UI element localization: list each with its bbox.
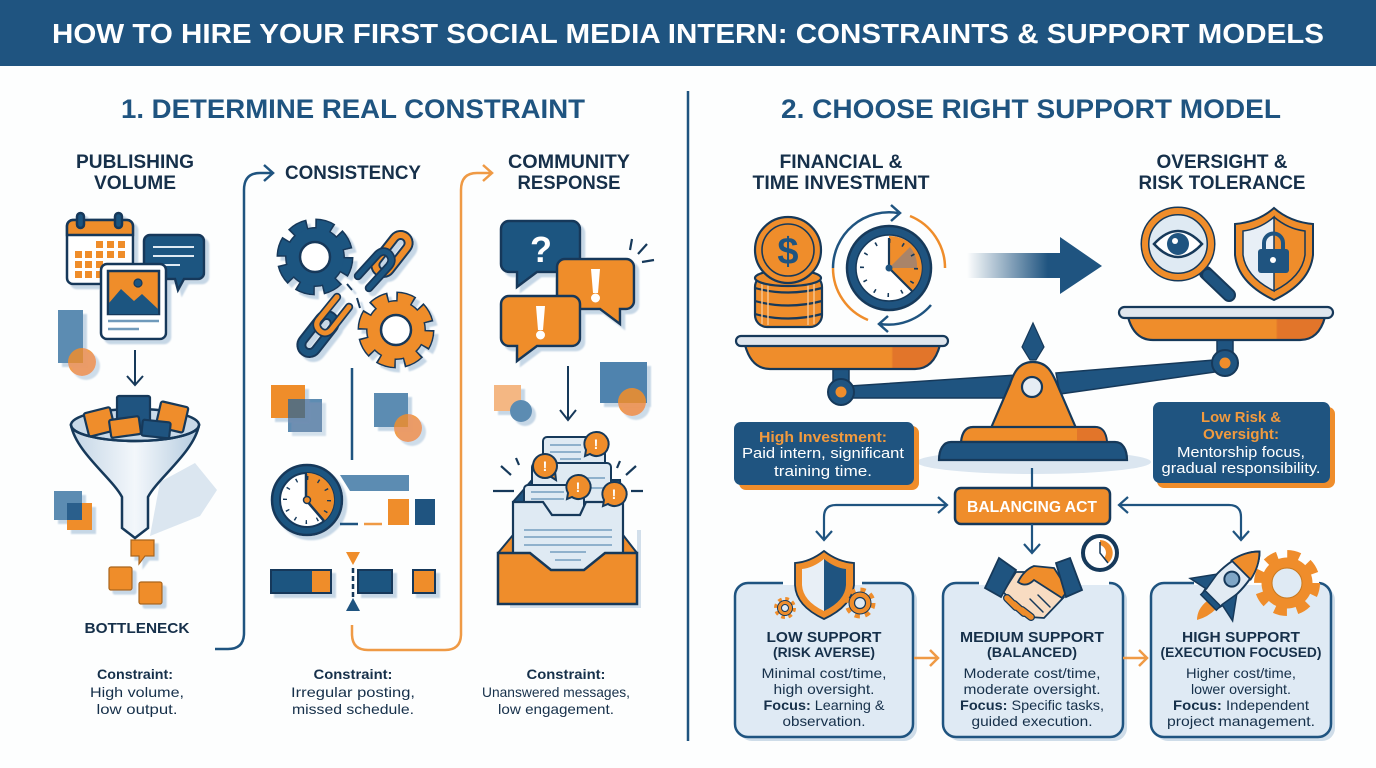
text: low support details bbox=[762, 629, 886, 729]
decorative shapes: community column bbox=[494, 362, 647, 422]
heading: oversight and risk tolerance bbox=[1138, 152, 1306, 194]
icon: magnifier with eye bbox=[1145, 211, 1229, 295]
arrow: low to medium support bbox=[914, 650, 938, 666]
callout: high investment: training time. bbox=[774, 464, 872, 480]
icon: handshake and small clock bbox=[979, 536, 1117, 618]
decorative shapes: blue rectangle and orange circle bbox=[58, 310, 96, 376]
text: medium support details: (BALANCED) bbox=[987, 645, 1077, 660]
text: low support details: observation. bbox=[782, 713, 866, 729]
text: low support details: (RISK AVERSE) bbox=[773, 645, 875, 660]
heading: publishing volume: VOLUME bbox=[94, 173, 176, 194]
divider line in consistency column bbox=[351, 368, 353, 460]
icon: gears and broken chain bbox=[284, 226, 427, 361]
text: high support details: lower oversight. bbox=[1191, 681, 1291, 697]
callout: low risk and oversight: Low Risk & bbox=[1201, 410, 1282, 426]
heading: financial and time investment bbox=[752, 152, 930, 194]
text: high support details: HIGH SUPPORT bbox=[1182, 629, 1300, 646]
callout: low risk and oversight: gradual responsibility. bbox=[1162, 461, 1320, 477]
decorative shapes: squares and circle bbox=[271, 385, 422, 442]
text: low support details: Focus: Learning & bbox=[764, 697, 885, 713]
text: constraint 2: Constraint: bbox=[314, 666, 392, 682]
icon: clock with schedule bars bbox=[272, 465, 435, 535]
text: medium support details bbox=[960, 629, 1104, 729]
arrows: balancing act to support cards bbox=[816, 497, 1249, 553]
icon: interrupted schedule blocks bbox=[271, 552, 435, 611]
icon: shield with lock bbox=[1235, 208, 1313, 300]
icon: speech bubbles with question and exclamation: ? bbox=[530, 229, 552, 270]
text: constraint 1 bbox=[90, 666, 184, 717]
decorative shapes: overlapping squares bbox=[54, 491, 92, 530]
heading: community response bbox=[508, 152, 630, 194]
text: high support details: (EXECUTION FOCUSED) bbox=[1160, 645, 1322, 660]
callout: high investment: Paid intern, significant bbox=[742, 446, 904, 462]
text: constraint 3 bbox=[482, 666, 630, 717]
text: high support details bbox=[1160, 629, 1322, 729]
text: low support details: high oversight. bbox=[774, 681, 874, 697]
arrow: medium to high support bbox=[1123, 650, 1147, 666]
heading: community response: COMMUNITY bbox=[508, 152, 630, 173]
text: constraint 3: Constraint: bbox=[526, 666, 606, 682]
text: high support details: project management. bbox=[1167, 713, 1315, 729]
label: balancing act: BALANCING ACT bbox=[967, 499, 1097, 516]
label: bottleneck: BOTTLENECK bbox=[84, 620, 190, 637]
callout: high investment: High Investment: bbox=[759, 430, 887, 446]
text: medium support details: MEDIUM SUPPORT bbox=[960, 629, 1104, 646]
text: constraint 1: Constraint: bbox=[97, 666, 173, 682]
text: low support details: Minimal cost/time, bbox=[762, 665, 886, 681]
text: high support details: Focus: Independent bbox=[1173, 697, 1309, 713]
arrow: investment to oversight bbox=[967, 237, 1102, 294]
callout: low risk and oversight: Oversight: bbox=[1203, 427, 1279, 443]
icon: overflowing inbox with alerts: ! bbox=[612, 486, 616, 502]
connector: scale to balancing act bbox=[1031, 468, 1033, 488]
callout: low risk and oversight bbox=[1153, 402, 1335, 488]
text: medium support details: guided execution. bbox=[972, 713, 1092, 729]
heading: financial and time investment: TIME INVESTMENT bbox=[752, 173, 930, 194]
text: high support details: Higher cost/time, bbox=[1186, 665, 1296, 681]
text: low support details: LOW SUPPORT bbox=[766, 629, 882, 646]
text: medium support details: Moderate cost/time, bbox=[964, 665, 1100, 681]
heading: consistency: CONSISTENCY bbox=[285, 163, 421, 184]
heading: community response: RESPONSE bbox=[518, 173, 620, 194]
text: medium support details: Focus: Specific tasks, bbox=[960, 697, 1104, 713]
heading: financial and time investment: FINANCIAL & bbox=[780, 152, 903, 173]
arrow: down to funnel bbox=[127, 350, 143, 385]
icon: coin stack bbox=[755, 217, 822, 327]
title banner: HOW TO HIRE YOUR FIRST SOCIAL MEDIA INTERN: CONSTRAINTS & SUPPORT MODELS bbox=[52, 18, 1324, 49]
text: medium support details: moderate oversight. bbox=[964, 681, 1100, 697]
icon: coin stack: $ bbox=[777, 231, 799, 273]
icon: overflowing inbox with alerts bbox=[493, 432, 643, 608]
arrow: connector to consistency bbox=[215, 165, 273, 649]
panel: low support bbox=[735, 551, 917, 741]
callout: low risk and oversight: Mentorship focus, bbox=[1177, 445, 1305, 461]
icon: speech bubbles with question and exclamation bbox=[501, 221, 654, 361]
heading: section 1: 1. DETERMINE REAL CONSTRAINT bbox=[121, 94, 586, 124]
icon: overflowing inbox with alerts: ! bbox=[594, 436, 598, 452]
icon: clock with cycle arrows bbox=[833, 205, 945, 332]
text: constraint 3: low engagement. bbox=[498, 701, 614, 717]
text: constraint 3: Unanswered messages, bbox=[482, 684, 630, 700]
icon: output items after bottleneck bbox=[109, 540, 162, 604]
text: constraint 2 bbox=[291, 666, 415, 717]
icon: funnel bottleneck bbox=[71, 396, 217, 538]
heading: publishing volume: PUBLISHING bbox=[76, 152, 194, 173]
text: constraint 1: low output. bbox=[96, 701, 178, 717]
panel: medium support bbox=[943, 536, 1127, 741]
heading: oversight and risk tolerance: OVERSIGHT & bbox=[1156, 152, 1288, 173]
arrow: down to inbox bbox=[560, 366, 576, 420]
arrow: connector to community response bbox=[352, 165, 492, 650]
text: constraint 1: High volume, bbox=[90, 684, 184, 700]
panel: high support bbox=[1151, 530, 1335, 741]
heading: section 2: 2. CHOOSE RIGHT SUPPORT MODEL bbox=[781, 94, 1281, 124]
callout: high investment bbox=[734, 422, 919, 490]
icon: calendar, chat and image post bbox=[67, 213, 204, 339]
text: constraint 2: missed schedule. bbox=[292, 701, 414, 717]
icon: overflowing inbox with alerts: ! bbox=[576, 479, 580, 495]
icon: rocket and gear bbox=[1187, 530, 1319, 624]
text: constraint 2: Irregular posting, bbox=[291, 684, 415, 700]
heading: publishing volume bbox=[76, 152, 194, 194]
chart: balance scale bbox=[736, 307, 1333, 474]
heading: oversight and risk tolerance: RISK TOLERANCE bbox=[1138, 173, 1306, 194]
icon: shield and small gears bbox=[776, 551, 872, 619]
icon: overflowing inbox with alerts: ! bbox=[543, 458, 547, 474]
label: balancing act bbox=[955, 488, 1110, 524]
title banner bbox=[0, 0, 1376, 66]
